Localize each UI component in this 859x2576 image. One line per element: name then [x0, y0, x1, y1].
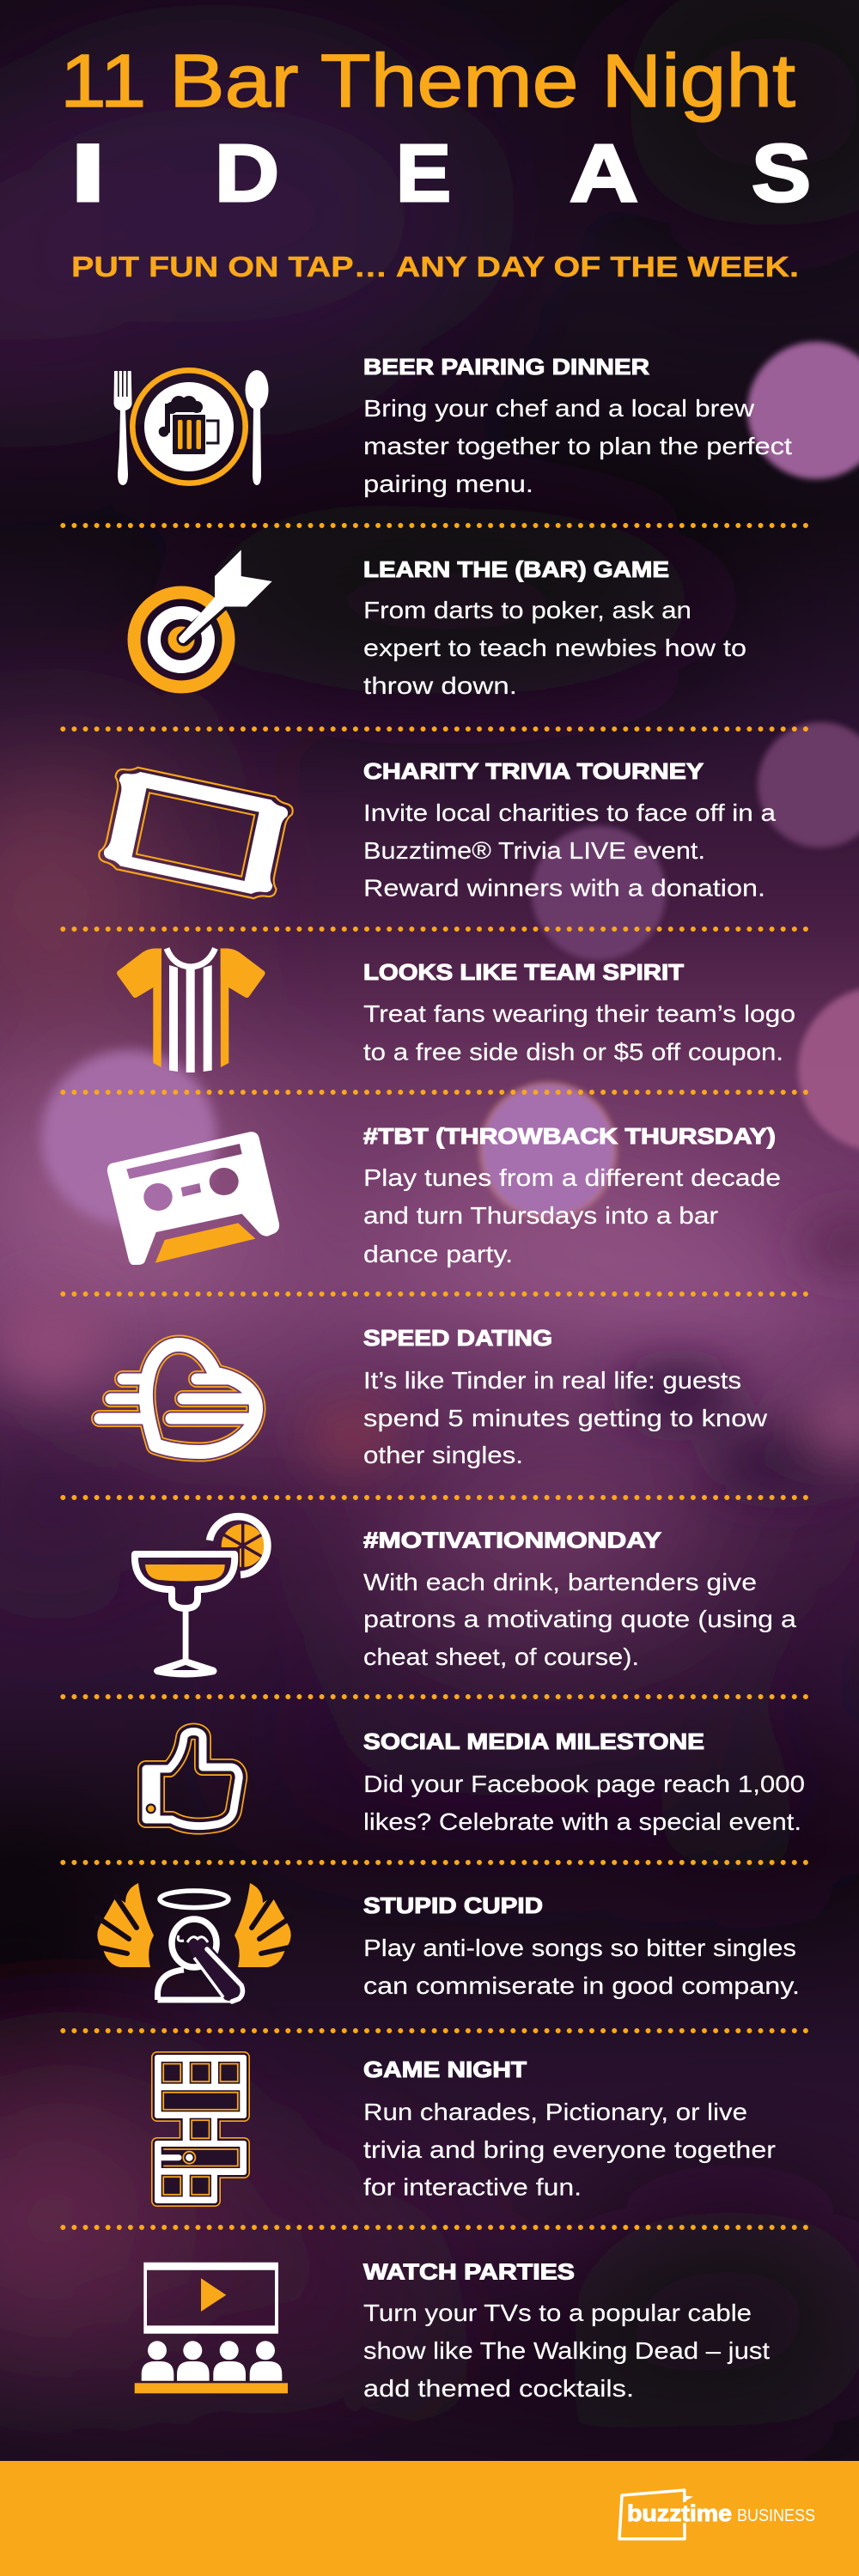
- icon: cassette tape: [107, 1132, 279, 1265]
- text block: [363, 597, 746, 699]
- text block: Treat fans wearing their team’s logo: [363, 1000, 795, 1027]
- icon: thumbs up: [146, 1731, 239, 1826]
- heading: GAME NIGHT: [363, 2057, 527, 2082]
- icon: game board: [157, 2057, 244, 2201]
- panel: charity trivia tourney: [97, 758, 777, 902]
- icon: dart and target: [134, 550, 272, 687]
- icon: speeding heart: [100, 1345, 256, 1452]
- icon: referee jersey: [117, 948, 265, 1072]
- text block: can commiserate in good company.: [363, 1972, 800, 1999]
- text block: [363, 1000, 795, 1065]
- panel: speed dating: [100, 1325, 767, 1468]
- text block: [363, 1164, 781, 1267]
- text block: master together to plan the perfect: [363, 433, 792, 459]
- heading: SOCIAL MEDIA MILESTONE: [363, 1728, 704, 1754]
- text block: [363, 2099, 776, 2200]
- panel: social media milestone: [146, 1728, 805, 1835]
- heading: STUPID CUPID: [363, 1893, 543, 1918]
- heading: #MOTIVATIONMONDAY: [363, 1527, 661, 1552]
- footer bar: [0, 2461, 859, 2576]
- text block: With each drink, bartenders give: [363, 1569, 757, 1595]
- heading: LEARN THE (BAR) GAME: [363, 556, 669, 582]
- text block: add themed cocktails.: [363, 2375, 634, 2402]
- text block: pairing menu.: [363, 471, 533, 497]
- text block: Bring your chef and a local brew: [363, 395, 754, 422]
- icon: facepalm angel with wings: [96, 1883, 292, 2002]
- panel: game night: [157, 2057, 776, 2201]
- heading: WATCH PARTIES: [363, 2258, 575, 2284]
- text block: expert to teach newbies how to: [363, 635, 746, 661]
- text block: patrons a motivating quote (using a: [363, 1606, 797, 1632]
- text block: and turn Thursdays into a bar: [363, 1202, 718, 1229]
- heading: IDEAS: [70, 128, 811, 219]
- text block: throw down.: [363, 672, 517, 699]
- text block: Buzztime® Trivia LIVE event.: [363, 837, 705, 864]
- panel: looks like team spirit: [117, 948, 795, 1072]
- heading: IDEAS: D: [215, 128, 279, 219]
- tagline: PUT FUN ON TAP… ANY DAY OF THE WEEK.: [71, 251, 799, 283]
- panel: tbt throwback thursday: [107, 1123, 781, 1267]
- text block: Invite local charities to face off in a: [363, 799, 777, 826]
- text block: Turn your TVs to a popular cable: [363, 2300, 752, 2326]
- heading: LOOKS LIKE TEAM SPIRIT: [363, 959, 684, 985]
- text block: Play tunes from a different decade: [363, 1164, 781, 1191]
- panel: learn the bar game: [134, 550, 746, 699]
- text block: It’s like Tinder in real life: guests: [363, 1367, 741, 1394]
- panel: watch parties: [135, 2258, 770, 2402]
- text block: dance party.: [363, 1241, 513, 1267]
- heading: SPEED DATING: [363, 1325, 552, 1351]
- text block: show like The Walking Dead – just: [363, 2337, 770, 2364]
- text block: trivia and bring everyone together: [363, 2136, 776, 2163]
- text block: Did your Facebook page reach 1,000: [363, 1771, 805, 1797]
- logo: buzztime business: buzztime: [627, 2500, 732, 2526]
- heading: #TBT (THROWBACK THURSDAY): [363, 1123, 776, 1149]
- text block: [363, 2300, 770, 2402]
- icon: tablet: [97, 763, 295, 902]
- heading: IDEAS: I: [70, 128, 106, 219]
- panel: motivation monday: [135, 1516, 797, 1678]
- logo: buzztime business: BUSINESS: [737, 2506, 815, 2525]
- icon: audience watching screen: [135, 2263, 288, 2393]
- heading: IDEAS: S: [752, 128, 811, 219]
- text block: Run charades, Pictionary, or live: [363, 2099, 747, 2125]
- text block: cheat sheet, of course).: [363, 1643, 639, 1670]
- icon: plate with beer mug: [113, 370, 268, 485]
- text block: spend 5 minutes getting to know: [363, 1405, 767, 1431]
- text block: [363, 395, 792, 497]
- heading: IDEAS: A: [570, 128, 638, 219]
- text block: other singles.: [363, 1442, 523, 1468]
- text block: [363, 1771, 805, 1835]
- panel: stupid cupid: [96, 1883, 800, 2002]
- text block: likes? Celebrate with a special event.: [363, 1808, 801, 1835]
- heading: CHARITY TRIVIA TOURNEY: [363, 758, 704, 784]
- icon: margarita glass: [135, 1516, 267, 1678]
- heading: IDEAS: E: [396, 128, 451, 219]
- text block: [363, 1935, 800, 1999]
- text block: Play anti-love songs so bitter singles: [363, 1935, 796, 1961]
- text block: for interactive fun.: [363, 2174, 582, 2200]
- text block: [363, 1367, 767, 1468]
- text block: [363, 799, 777, 902]
- panel: beer pairing dinner: [113, 354, 792, 497]
- text block: Reward winners with a donation.: [363, 874, 765, 902]
- logo: buzztime business: [619, 2490, 815, 2539]
- text block: From darts to poker, ask an: [363, 597, 691, 623]
- title: 11 Bar Theme Night: [60, 39, 795, 123]
- text block: [363, 1569, 797, 1670]
- text block: to a free side dish or $5 off coupon.: [363, 1039, 783, 1065]
- heading: BEER PAIRING DINNER: [363, 354, 649, 380]
